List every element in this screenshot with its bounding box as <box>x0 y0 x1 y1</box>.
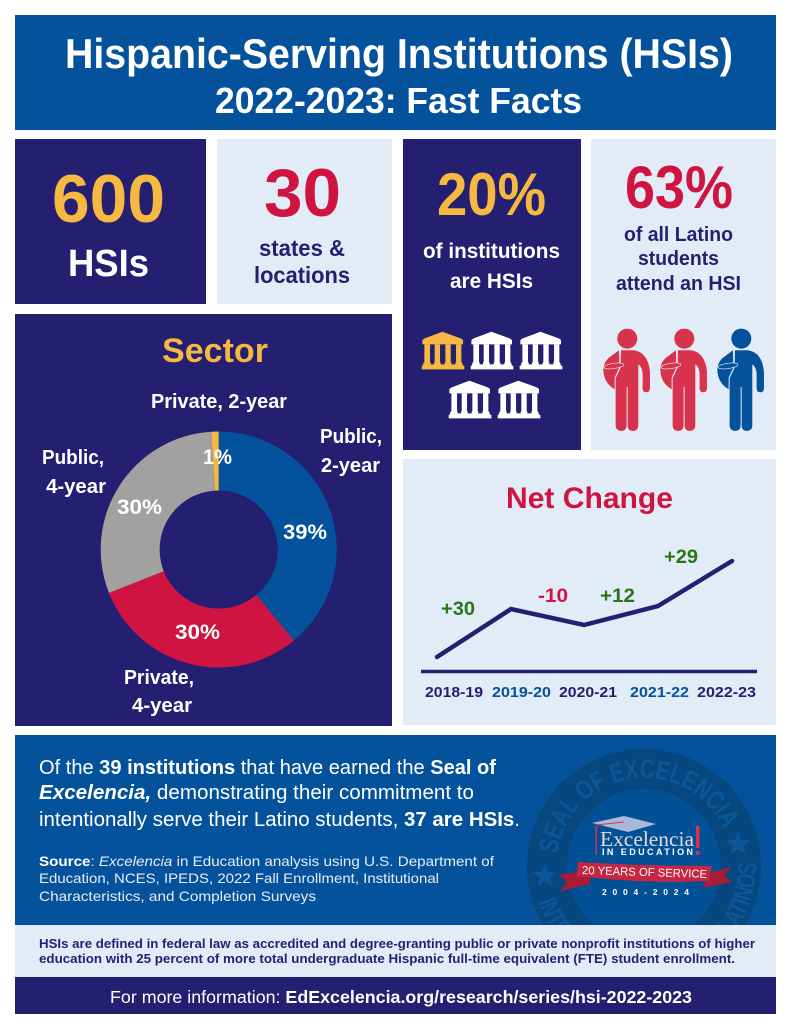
definition strip: HSIs are defined in federal law as accredited and degree-granting public or private nonprofit institutions of higher <box>39 937 755 951</box>
stat: 30: 30 <box>264 155 341 231</box>
label: states and locations: states & <box>259 235 345 261</box>
label: of all Latino students attend an HSI: of all Latino <box>624 224 733 246</box>
line chart: 2019-20 <box>492 684 551 701</box>
source text <box>39 853 494 904</box>
panel: 600 HSIs <box>15 139 206 304</box>
label: of institutions are HSIs: of institutions <box>423 240 560 263</box>
icon: institutions <box>422 332 562 418</box>
label: states and locations: locations <box>254 262 350 288</box>
line chart: 2020-21 <box>559 684 617 701</box>
source text: Characteristics, and Completion Surveys <box>39 888 316 904</box>
donut labels: Private, 2-year <box>151 391 287 413</box>
footer bar: For more information: EdExcelencia.org/research/series/hsi-2022-2023 <box>110 987 692 1007</box>
icon: students <box>603 329 764 431</box>
donut labels: 2-year <box>321 455 380 477</box>
panel: 20 percent of institutions <box>403 139 581 450</box>
donut labels: 39% <box>283 521 327 544</box>
heading: Sector: Sector <box>162 332 268 370</box>
donut labels: Private, <box>124 667 194 689</box>
line chart: +29 <box>664 547 698 568</box>
header banner <box>15 15 776 130</box>
label: of all Latino students attend an HSI: attend an HSI <box>616 273 741 295</box>
definition strip <box>15 925 776 977</box>
subtitle: 2022-2023: Fast Facts <box>215 80 582 121</box>
Excelencia logo: 2004-2024 <box>602 887 689 897</box>
label: of all Latino students attend an HSI: students <box>638 248 719 270</box>
seal watermark: SEAL OF EXCELENCIA <box>540 759 738 852</box>
ribbon <box>559 870 590 891</box>
line chart: -10 <box>538 586 568 607</box>
label: of all Latino students attend an HSI <box>616 224 741 295</box>
label: HSIs: HSIs <box>68 243 149 285</box>
footer bar <box>15 977 776 1014</box>
donut labels: Public, <box>42 447 104 469</box>
panel: 30 states and locations <box>217 139 392 304</box>
line chart: +30 <box>441 599 475 620</box>
donut labels: 4-year <box>46 476 106 498</box>
donut labels: 1% <box>203 446 232 469</box>
donut labels: 4-year <box>132 695 192 717</box>
panel: sector <box>15 314 392 726</box>
donut labels: 30% <box>175 621 220 644</box>
panel: seal of Excelencia <box>15 735 776 925</box>
statement text: intentionally serve their Latino students, 37 are HSIs. <box>39 809 520 831</box>
statement text: Excelencia, demonstrating their commitment to <box>39 782 474 804</box>
Excelencia logo <box>559 816 732 897</box>
donut labels: 30% <box>117 496 162 519</box>
seal watermark <box>527 749 761 925</box>
Excelencia logo: IN EDUCATION <box>602 847 693 857</box>
line chart <box>421 547 757 701</box>
donut chart <box>101 431 337 668</box>
label: states and locations <box>254 235 350 288</box>
statement text <box>39 757 520 831</box>
line chart: 2018-19 <box>425 684 483 701</box>
label: of institutions are HSIs <box>423 240 560 293</box>
stat: 63%: 63% <box>625 154 733 221</box>
line chart: 2022-23 <box>697 684 756 701</box>
Excelencia logo: 20 YEARS OF SERVICE <box>582 865 708 881</box>
line chart: 2021-22 <box>630 684 689 701</box>
donut labels <box>42 391 382 717</box>
line chart: +12 <box>600 586 635 607</box>
stat: 20%: 20% <box>437 161 546 228</box>
source text: Source : Excelencia in Education analysis using U.S. Department of <box>39 853 494 869</box>
icon: graduation cap <box>592 816 656 832</box>
statement text: Of the 39 institutions that have earned the Seal of <box>39 757 496 779</box>
panel: net change <box>403 459 776 725</box>
donut labels: Public, <box>320 426 382 448</box>
title: Hispanic-Serving Institutions (HSIs) <box>65 30 733 77</box>
panel: 63 percent of Latino students <box>591 139 776 450</box>
stat: 600: 600 <box>52 161 165 237</box>
label: of institutions are HSIs: are HSIs <box>450 270 533 293</box>
Excelencia logo: Excelencia <box>600 827 695 851</box>
heading: Net Change: Net Change <box>506 482 673 515</box>
definition strip: education with 25 percent of more total undergraduate Hispanic full-time equivalent (FTE) student enrollment. <box>39 952 735 966</box>
source text: Education, NCES, IPEDS, 2022 Fall Enrollment, Institutional <box>39 870 439 886</box>
seal watermark: INTENTIONALLY SERVING LATINOS <box>538 863 756 925</box>
